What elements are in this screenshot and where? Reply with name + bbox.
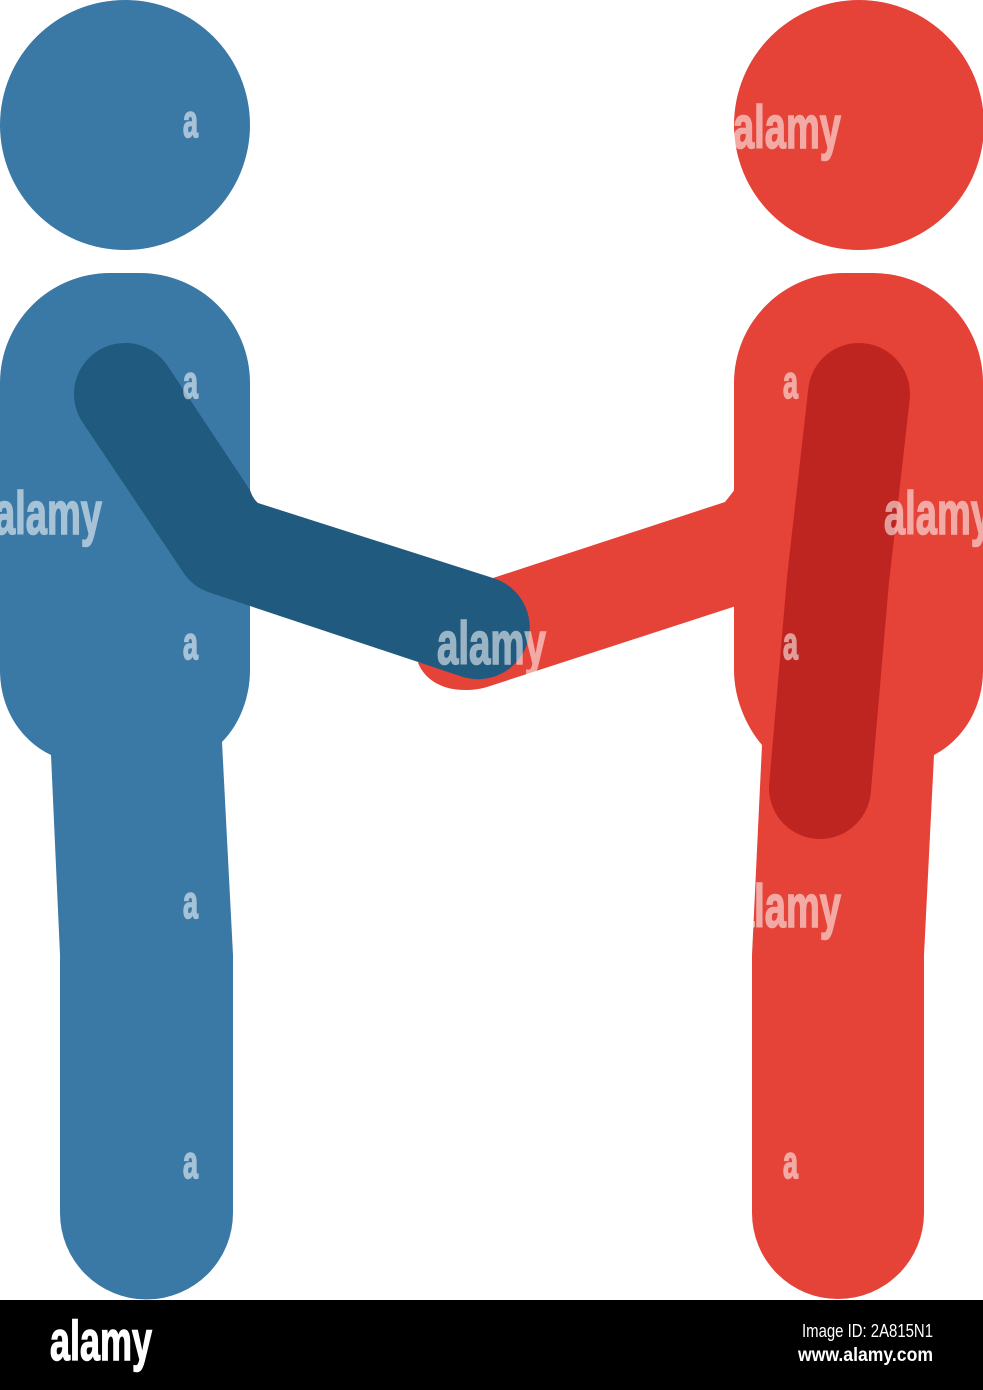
blue body and legs (0, 273, 250, 1300)
watermark letters: red figure: a (783, 1136, 798, 1188)
footer logo: alamy (50, 1309, 152, 1372)
watermark: right leg: alamy (733, 873, 841, 940)
watermark letters: blue figure: a (183, 617, 198, 669)
red upper arm (820, 394, 859, 788)
watermark letters: blue figure: a (183, 95, 198, 147)
watermark: right head: alamy (733, 94, 841, 161)
watermark letters: blue figure: a (183, 356, 198, 408)
red forearm and hand (418, 488, 736, 690)
blue figure (0, 0, 530, 1300)
watermark letters: blue figure: a (183, 876, 198, 928)
image id: Image ID: 2A815N1 (802, 1321, 933, 1341)
red body and legs (734, 273, 983, 1299)
watermarks (0, 94, 983, 1188)
watermark letters: blue figure: a (183, 1136, 198, 1188)
footer bar (0, 1300, 983, 1390)
watermark letters: blue figure (183, 95, 198, 1188)
watermark letters: red figure: a (783, 356, 798, 408)
blue head (0, 0, 250, 250)
blue arm and hand (74, 343, 530, 679)
watermark letters: red figure: a (783, 617, 798, 669)
watermark letters: red figure (783, 356, 798, 1188)
red figure (418, 0, 983, 1299)
website: www.alamy.com (797, 1345, 933, 1366)
red head (734, 0, 983, 250)
watermark: hands: alamy (437, 610, 546, 677)
